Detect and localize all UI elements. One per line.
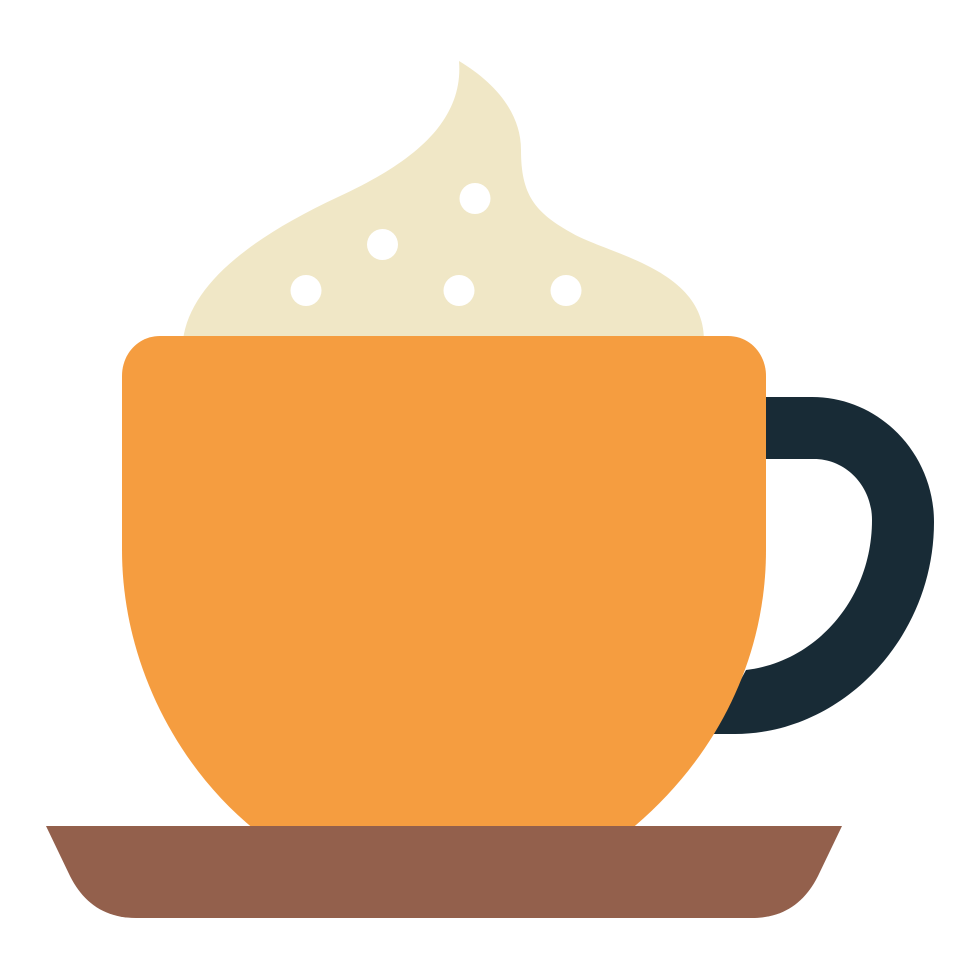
saucer — [46, 826, 842, 918]
cup body — [122, 336, 766, 830]
cup handle — [712, 397, 934, 734]
whipped cream — [183, 61, 704, 340]
sprinkles — [290, 183, 582, 306]
